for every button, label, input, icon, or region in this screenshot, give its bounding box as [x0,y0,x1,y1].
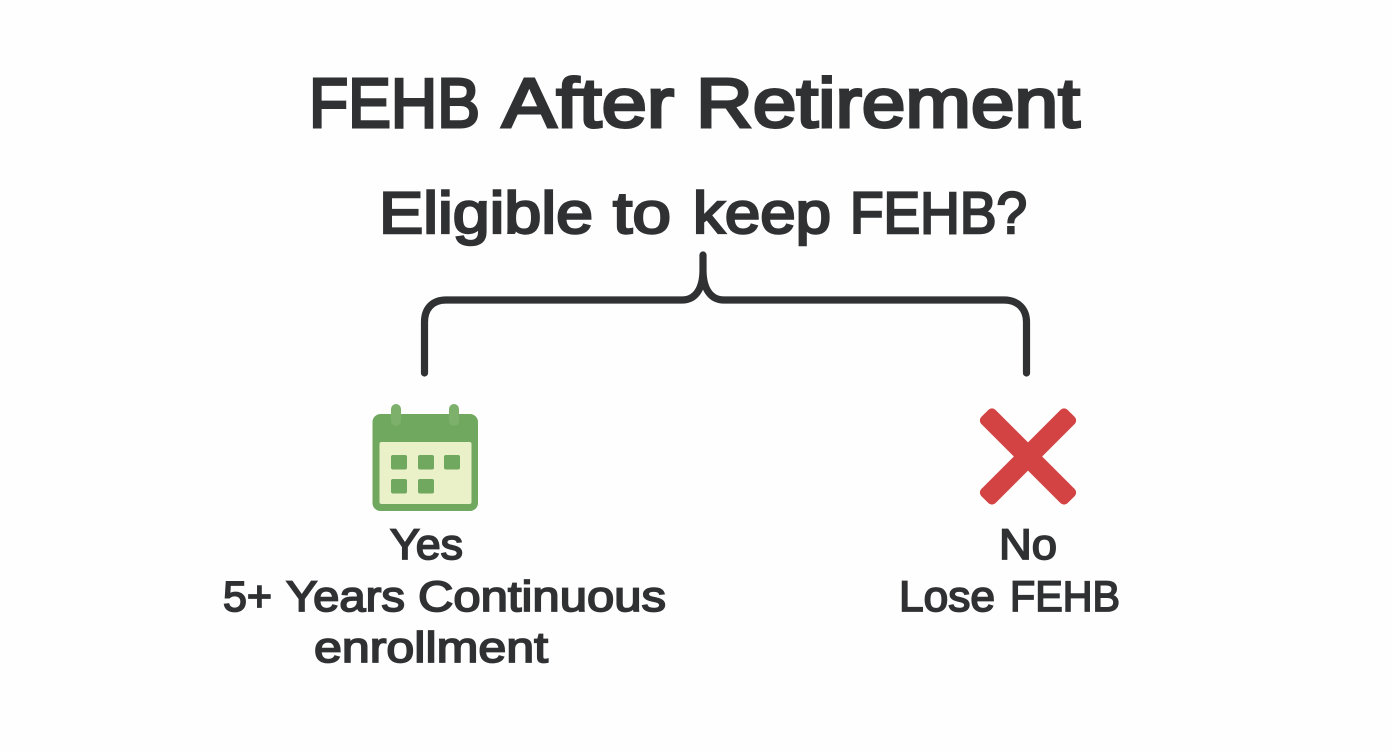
icon: green calendar [372,404,478,511]
decision bracket connector [424,255,1026,373]
question heading: keep [693,181,831,246]
yes outcome label: Years [286,573,405,621]
title: After [502,64,674,142]
icon: red cross [942,370,1114,543]
title [309,64,1080,142]
question heading: to [613,181,671,246]
no outcome label: No [999,521,1057,569]
question heading: Eligible [379,181,593,246]
no outcome label: FEHB [1010,573,1120,621]
title: Retirement [696,64,1080,142]
question heading: FEHB? [850,181,1027,246]
yes outcome label: 5+ [223,573,272,621]
no outcome label: Lose [899,573,995,621]
no outcome label [899,521,1120,621]
question heading [379,181,1027,246]
title: FEHB [309,64,480,142]
yes outcome label: Yes [390,521,463,569]
yes outcome label [223,521,666,672]
yes outcome label: Continuous [418,573,666,621]
yes outcome label: enrollment [314,624,548,672]
